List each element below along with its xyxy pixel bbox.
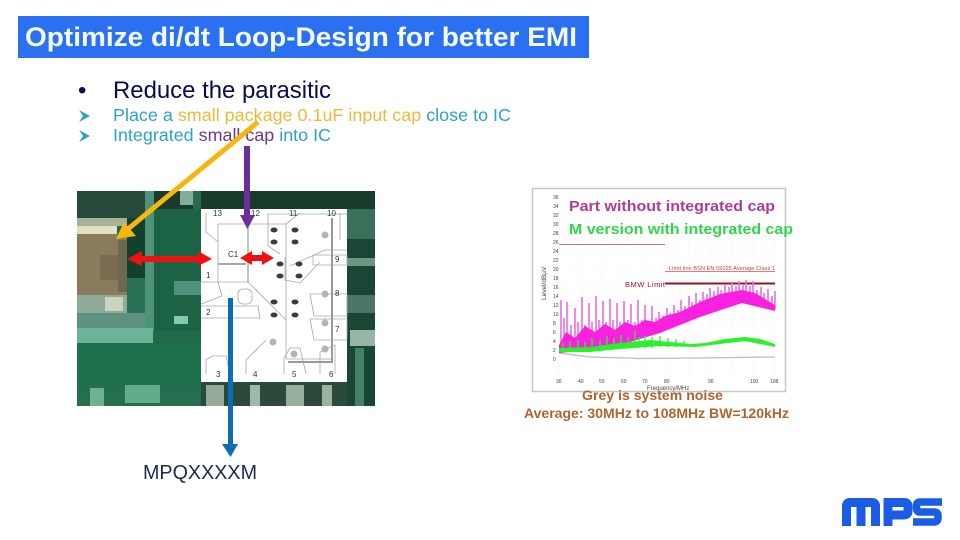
axes labels: 30 — [553, 222, 559, 228]
main bullet: Reduce the parasitic — [113, 77, 331, 104]
grid — [559, 195, 775, 375]
pin labels: 3 — [216, 370, 221, 379]
axes labels: 4 — [553, 339, 556, 345]
legend: without cap: Part without integrated cap — [569, 198, 775, 215]
sub bullet: integrated cap: Integrated small cap into IC — [113, 125, 331, 145]
EMI chart: BMW Limit — [625, 280, 666, 289]
pin labels: 12 — [251, 209, 260, 218]
PCB photo — [77, 191, 375, 406]
axes labels: Level/dBµV — [541, 266, 548, 300]
arrow: purple to integrated cap — [240, 146, 255, 229]
axes labels: 0 — [553, 357, 556, 363]
legend: with cap: M version with integrated cap — [569, 221, 793, 238]
system noise trace — [559, 353, 775, 358]
main bullet: • — [78, 77, 86, 104]
EMI chart: Limit line BSN EN 55025 Average Class 1 — [669, 266, 775, 272]
pin labels: 7 — [335, 325, 340, 334]
axes labels: 60 — [621, 379, 627, 385]
axes labels: 10 — [553, 312, 559, 318]
green trace — [559, 331, 775, 352]
magenta trace — [559, 280, 775, 353]
chart note: Grey is system noise — [582, 387, 723, 403]
axes labels: 90 — [708, 379, 714, 385]
via pads — [270, 228, 302, 318]
axes labels: 14 — [553, 294, 559, 300]
axes labels: Frequency/MHz — [647, 386, 689, 392]
axes labels: 2 — [553, 348, 556, 354]
part name label: MPQXXXXM — [143, 462, 257, 484]
axes labels — [541, 195, 779, 392]
axes labels: 80 — [664, 379, 670, 385]
pin labels: 8 — [335, 289, 340, 298]
arrow: red parasitic distance long — [127, 251, 212, 266]
axes labels: 30 — [556, 379, 562, 385]
axes labels: 12 — [553, 303, 559, 309]
axes labels: 6 — [553, 330, 556, 336]
chart note: Average: 30MHz to 108MHz BW=120kHz — [524, 405, 789, 421]
title banner — [18, 16, 589, 58]
pin labels: 11 — [289, 209, 298, 218]
pin labels: 9 — [335, 255, 340, 264]
arrow: orange to input cap — [116, 122, 258, 239]
pin labels: 2 — [206, 308, 211, 317]
bullet list — [78, 77, 511, 145]
axes labels: 22 — [553, 258, 559, 264]
sub bullet: input cap: Place a small package 0.1uF input cap close to IC — [113, 105, 511, 125]
pin labels: C1 — [228, 250, 239, 259]
axes labels: 24 — [553, 249, 559, 255]
axes labels: 100 — [750, 379, 759, 385]
package outline and traces — [201, 213, 347, 374]
pin labels: 5 — [292, 370, 297, 379]
axes labels: 108 — [770, 379, 779, 385]
IC layout diagram — [201, 209, 347, 382]
pin labels: 6 — [329, 370, 334, 379]
pin labels: 4 — [253, 370, 258, 379]
axes labels: 34 — [553, 204, 559, 210]
axes labels: 50 — [599, 379, 605, 385]
axes labels: 70 — [642, 379, 648, 385]
axes labels: 18 — [553, 276, 559, 282]
pin labels — [206, 209, 340, 379]
chart note — [524, 387, 789, 421]
logo letter shape: M — [846, 502, 876, 526]
MPS logo — [846, 502, 942, 526]
pin labels: 10 — [327, 209, 336, 218]
EMI chart — [532, 188, 793, 392]
limit lines — [559, 244, 665, 246]
title banner: Optimize di/dt Loop-Design for better EMI — [25, 22, 577, 52]
arrow: blue to MPQ part — [222, 298, 238, 457]
logo letter shape: S — [913, 502, 942, 522]
pin labels: 13 — [213, 209, 222, 218]
arrow: red parasitic distance short — [240, 251, 274, 265]
axes labels: 28 — [553, 231, 559, 237]
axes labels: 20 — [553, 267, 559, 273]
axes labels: 36 — [553, 195, 559, 201]
logo letter shape: P — [888, 502, 908, 526]
axes labels: 16 — [553, 285, 559, 291]
axes labels: 32 — [553, 213, 559, 219]
axes labels: 26 — [553, 240, 559, 246]
axes labels: 40 — [578, 379, 584, 385]
pin labels: 1 — [206, 271, 211, 280]
axes labels: 8 — [553, 321, 556, 327]
